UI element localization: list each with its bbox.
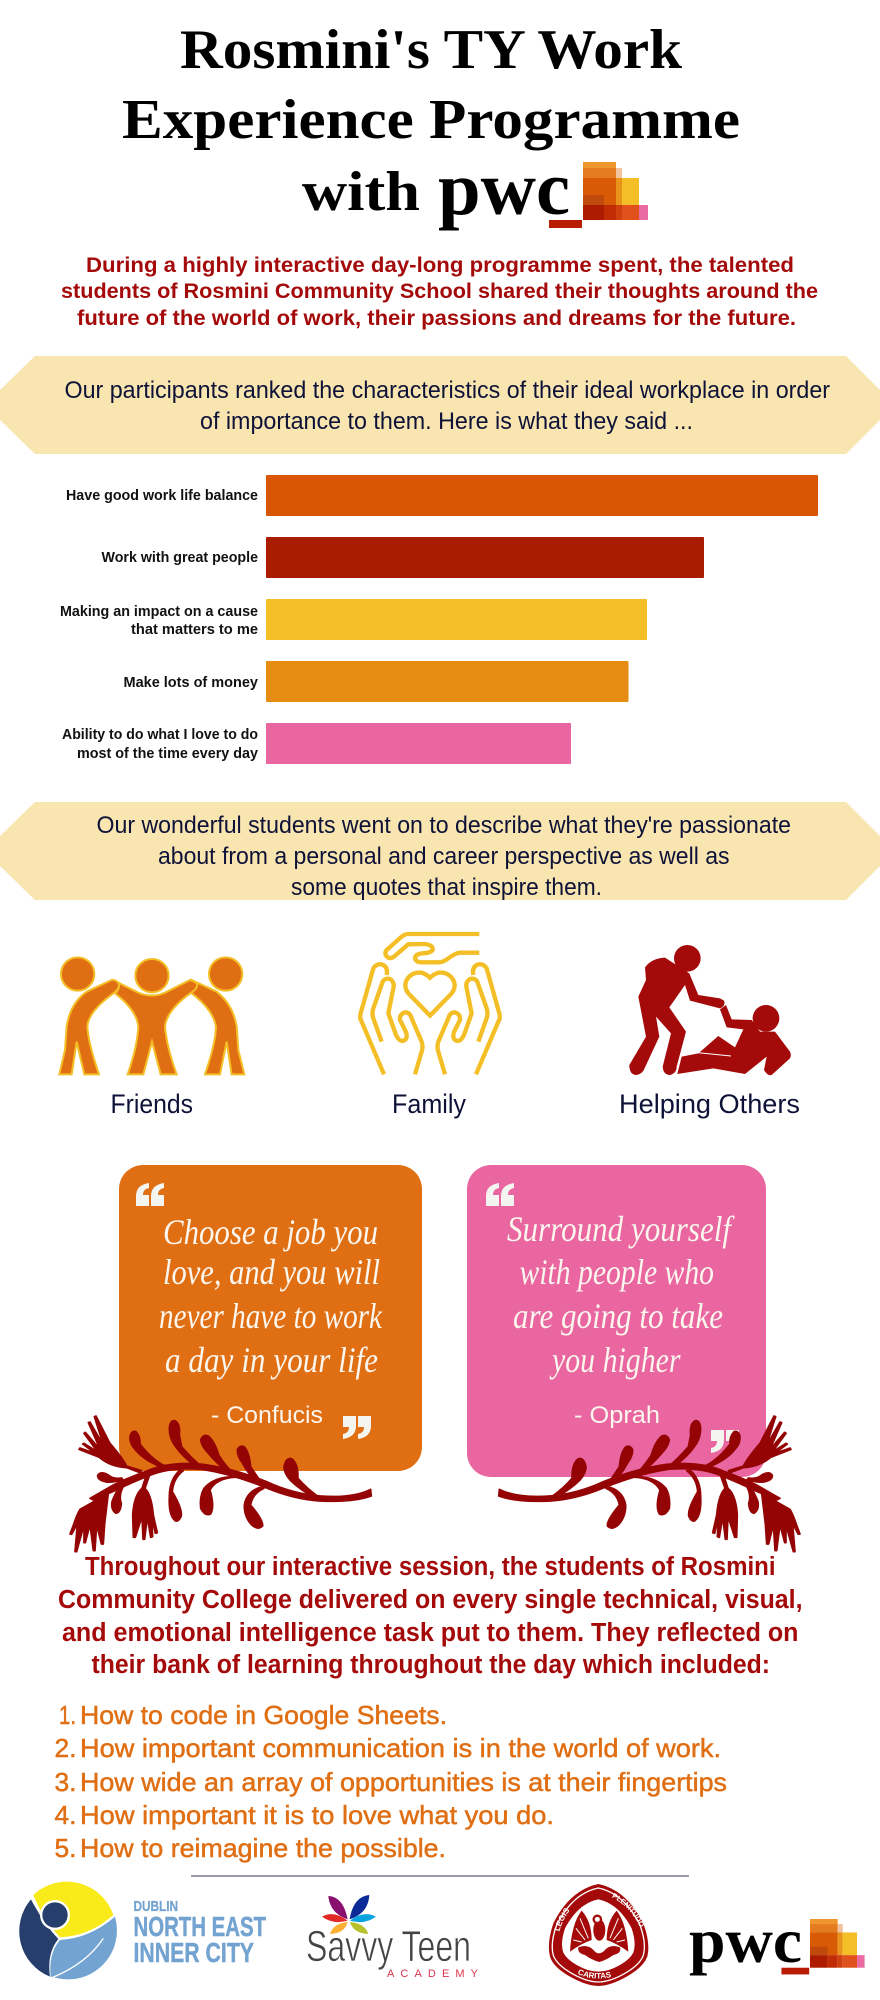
- logo: Savvy Teen Academy: Savvy Teen: [306, 1922, 471, 1971]
- bar: making an impact: that matters to me: [131, 622, 258, 638]
- logo: Savvy Teen Academy: [306, 1895, 479, 1980]
- bar: making an impact: Making an impact on a cause: [60, 604, 258, 620]
- intro text: students of Rosmini Community School shared their thoughts around the: [61, 280, 818, 303]
- banner: passions intro: [0, 802, 880, 901]
- closing paragraph: and emotional intelligence task put to them. They reflected on: [62, 1619, 798, 1647]
- icon labels: Helping Others: [619, 1089, 800, 1119]
- icon: closing quote marks: [711, 1430, 739, 1453]
- numbered learning list: How to code in Google Sheets.: [80, 1700, 447, 1730]
- numbered learning list: 1.: [59, 1700, 76, 1730]
- bar: lots of money: [124, 661, 628, 702]
- logo: pwc heading: pwc: [438, 147, 570, 231]
- banner: ranking intro: [0, 356, 880, 454]
- logo: Rosmini crest: CARITAS: [578, 1970, 611, 1978]
- banner: ranking intro: of importance to them. Here is what they said ...: [200, 408, 693, 435]
- numbered learning list: 5.: [54, 1833, 76, 1863]
- intro text: [61, 254, 818, 330]
- panel: Oprah quote: you higher: [550, 1340, 681, 1380]
- numbered learning list: 2.: [54, 1733, 76, 1763]
- logo: Rosmini crest: PLENITUDO: [612, 1893, 644, 1926]
- icon: helping others: [629, 945, 791, 1075]
- closing paragraph: [58, 1553, 802, 1679]
- logo: Rosmini crest: [548, 1884, 648, 1986]
- panel: Confucius quote: never have to work: [159, 1296, 383, 1336]
- logo: Savvy Teen Academy: ACADEMY: [387, 1968, 479, 1980]
- closing paragraph: their bank of learning throughout the day which included:: [92, 1651, 770, 1679]
- numbered learning list: 3.: [54, 1767, 76, 1797]
- closing paragraph: Throughout our interactive session, the students of Rosmini: [85, 1553, 776, 1581]
- bar: great people: [102, 537, 704, 578]
- title: Rosmini's TY Work: [180, 19, 683, 81]
- numbered learning list: How to reimagine the possible.: [80, 1833, 446, 1863]
- title: [122, 19, 740, 223]
- logo: pwc heading: [438, 147, 648, 231]
- bar: making an impact: [60, 599, 647, 640]
- logo: Rosmini crest: LEGIS: [554, 1908, 569, 1932]
- icon: opening quote marks: [136, 1183, 164, 1206]
- numbered learning list: How important it is to love what you do.: [80, 1800, 554, 1830]
- bar: work life balance: Have good work life balance: [66, 488, 258, 504]
- bar: do what I love: most of the time every day: [77, 746, 258, 762]
- panel: Confucius quote: Choose a job you: [163, 1212, 378, 1252]
- panel: Confucius quote: - Confucis: [211, 1402, 323, 1429]
- logo: pwc footer: [689, 1905, 865, 1976]
- panel: Confucius quote: [119, 1165, 422, 1471]
- bar: great people: Work with great people: [102, 550, 258, 566]
- bar chart: [60, 475, 818, 764]
- logo: pwc footer: pwc: [689, 1905, 802, 1976]
- logo: Dublin North East Inner City: [19, 1882, 266, 1979]
- panel: Oprah quote: Surround yourself: [507, 1209, 735, 1249]
- closing paragraph: Community College delivered on every single technical, visual,: [58, 1586, 802, 1614]
- icon: family: [360, 934, 500, 1074]
- decoration: right floral branch: [499, 1416, 800, 1552]
- banner: passions intro: Our wonderful students went on to describe what they're passionate: [96, 812, 791, 839]
- icon labels: [110, 1089, 800, 1119]
- panel: Oprah quote: [467, 1165, 766, 1477]
- bar: work life balance: [66, 475, 818, 516]
- panel: Oprah quote: - Oprah: [574, 1402, 660, 1429]
- decoration: left floral branch: [70, 1416, 371, 1552]
- panel: Confucius quote: a day in your life: [165, 1340, 378, 1380]
- title: with: [302, 161, 420, 223]
- banner: passions intro: about from a personal and career perspective as well as: [158, 843, 730, 870]
- numbered learning list: [54, 1700, 727, 1863]
- icon labels: Family: [392, 1089, 466, 1119]
- numbered learning list: 4.: [54, 1800, 76, 1830]
- bar: do what I love: [62, 723, 571, 764]
- numbered learning list: How wide an array of opportunities is at their fingertips: [80, 1767, 727, 1797]
- panel: Confucius quote: love, and you will: [163, 1252, 380, 1292]
- intro text: During a highly interactive day-long programme spent, the talented: [86, 254, 794, 277]
- banner: ranking intro: Our participants ranked the characteristics of their ideal workplace in order: [64, 377, 830, 404]
- numbered learning list: How important communication is in the world of work.: [80, 1733, 721, 1763]
- logo: Dublin North East Inner City: NORTH EAST: [134, 1911, 266, 1942]
- icon: friends: [59, 957, 244, 1074]
- bar: lots of money: Make lots of money: [124, 675, 258, 691]
- title: Experience Programme: [122, 89, 740, 151]
- intro text: future of the world of work, their passions and dreams for the future.: [77, 307, 796, 330]
- logo: Dublin North East Inner City: INNER CITY: [134, 1937, 254, 1968]
- banner: passions intro: some quotes that inspire them.: [291, 874, 602, 901]
- logo: Dublin North East Inner City: DUBLIN: [134, 1898, 178, 1915]
- icon labels: Friends: [110, 1089, 193, 1119]
- panel: Oprah quote: are going to take: [513, 1296, 723, 1336]
- bar: do what I love: Ability to do what I love to do: [62, 727, 258, 743]
- icon: opening quote marks: [486, 1183, 514, 1206]
- panel: Oprah quote: with people who: [520, 1252, 714, 1292]
- icon: closing quote marks: [343, 1416, 371, 1439]
